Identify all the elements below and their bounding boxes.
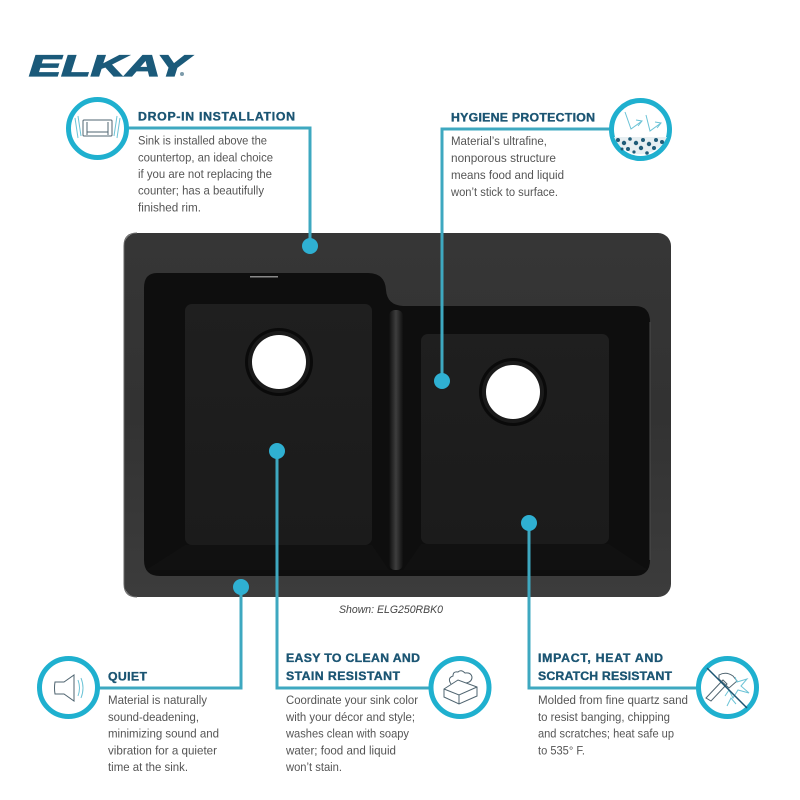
callout: quiet bbox=[40, 579, 249, 774]
body text: time at the sink. bbox=[108, 760, 188, 774]
body text bbox=[285, 693, 418, 774]
leader line to bowl bbox=[269, 443, 431, 688]
body text: countertop, an ideal choice bbox=[138, 150, 273, 164]
body text bbox=[108, 693, 219, 774]
body text: with your décor and style; bbox=[285, 710, 415, 724]
leader line to bowl bbox=[434, 129, 610, 389]
body text: sound-deadening, bbox=[108, 710, 199, 724]
callout: drop-in installation bbox=[68, 100, 318, 254]
body text bbox=[138, 134, 273, 214]
product photo: black double-bowl sink bbox=[124, 233, 671, 597]
icon: nonporous surface bbox=[612, 100, 670, 158]
icon: drop-in sink bbox=[68, 100, 126, 158]
body text: Material is naturally bbox=[108, 693, 208, 707]
body text: won’t stick to surface. bbox=[450, 185, 558, 199]
icon: soap bar bbox=[431, 658, 489, 716]
body text: Sink is installed above the bbox=[138, 134, 267, 148]
body text: washes clean with soapy bbox=[285, 726, 410, 740]
body text: and scratches; heat safe up bbox=[538, 726, 674, 740]
heading: EASY TO CLEAN AND bbox=[286, 651, 420, 665]
heading bbox=[286, 651, 420, 683]
body text: Material’s ultrafine, bbox=[451, 134, 547, 148]
heading: QUIET bbox=[108, 670, 147, 684]
heading: HYGIENE PROTECTION bbox=[451, 110, 595, 124]
body text: finished rim. bbox=[138, 200, 201, 214]
body text: water; food and liquid bbox=[285, 744, 396, 758]
heading: STAIN RESISTANT bbox=[286, 669, 400, 683]
body text: to resist banging, chipping bbox=[538, 710, 670, 724]
heading: IMPACT, HEAT AND bbox=[538, 651, 663, 665]
callout: hygiene protection bbox=[434, 100, 670, 389]
caption: model shown: Shown: ELG250RBK0 bbox=[339, 604, 444, 616]
heading: SCRATCH RESISTANT bbox=[538, 669, 672, 683]
body text bbox=[538, 693, 688, 758]
body text: nonporous structure bbox=[451, 151, 556, 165]
body text: counter; has a beautifully bbox=[138, 184, 265, 198]
logo: Elkay bbox=[29, 50, 194, 83]
leader line to rim bbox=[128, 128, 318, 254]
heading: DROP-IN INSTALLATION bbox=[138, 110, 295, 124]
body text: to 535° F. bbox=[538, 744, 585, 758]
body text: minimizing sound and bbox=[108, 726, 219, 740]
callout: easy to clean and stain resistant bbox=[269, 443, 489, 774]
logo: Elkay: ELKAY bbox=[29, 50, 194, 83]
leader line to rim bbox=[99, 579, 249, 688]
body text bbox=[450, 134, 564, 199]
heading bbox=[538, 651, 672, 683]
body text: means food and liquid bbox=[451, 168, 564, 182]
body text: won’t stain. bbox=[285, 760, 342, 774]
callout: impact, heat and scratch resistant bbox=[521, 515, 756, 758]
body text: Coordinate your sink color bbox=[286, 693, 418, 707]
leader line to bowl bbox=[521, 515, 698, 688]
icon: hammer crossed out bbox=[698, 658, 756, 716]
body text: vibration for a quieter bbox=[108, 744, 217, 758]
body text: if you are not replacing the bbox=[138, 167, 272, 181]
body text: Molded from fine quartz sand bbox=[538, 693, 688, 707]
icon: speaker bbox=[40, 658, 98, 716]
